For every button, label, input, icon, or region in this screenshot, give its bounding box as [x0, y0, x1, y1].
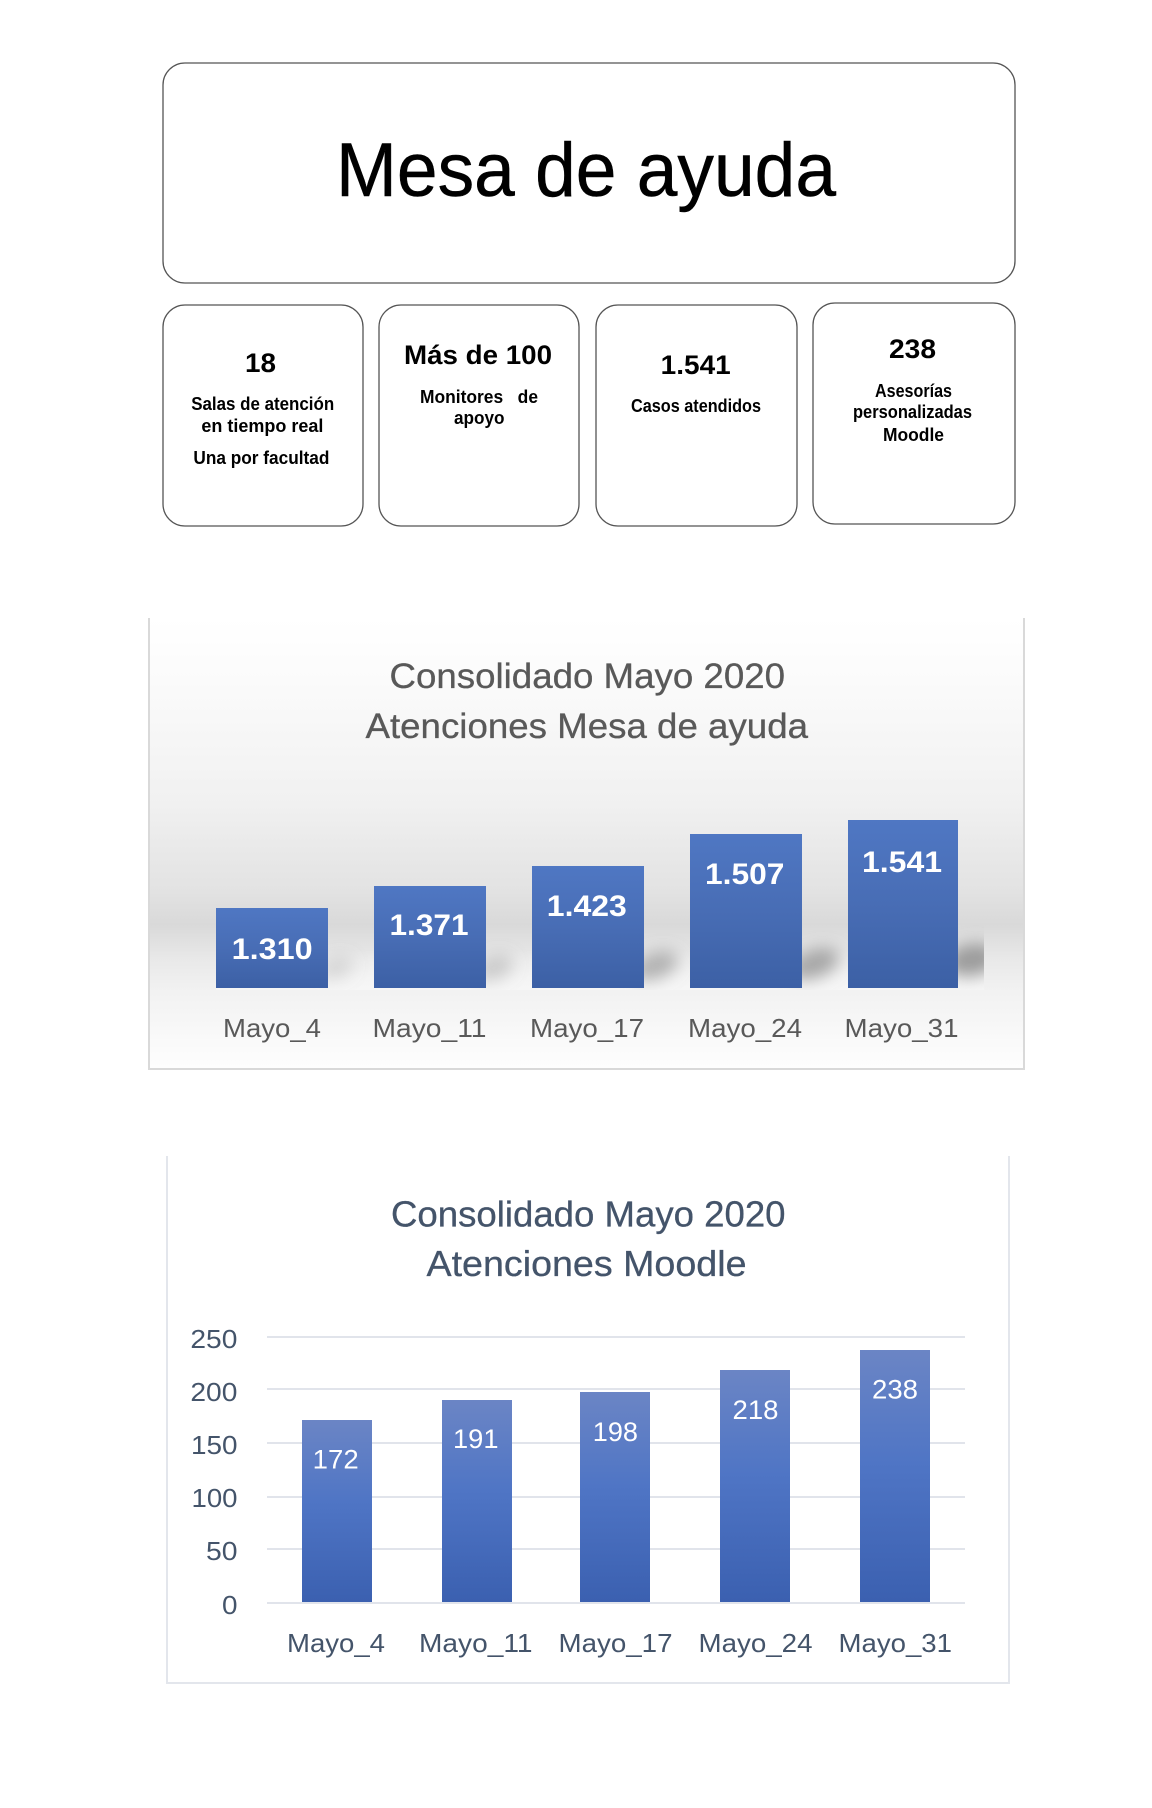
card: asesorías personalizadas: 238 — [889, 334, 936, 364]
card: monitores de apoyo: Monitores de — [420, 387, 538, 407]
card: salas de atención: en tiempo real — [201, 416, 323, 436]
bars — [216, 820, 958, 988]
value labels — [232, 846, 942, 966]
card: salas de atención — [163, 305, 363, 526]
card: salas de atención: 18 — [245, 348, 276, 378]
panel: chart atenciones moodle — [167, 1156, 1009, 1683]
value labels: 191 — [453, 1424, 498, 1454]
category labels: Mayo_17 — [558, 1628, 672, 1658]
panel: chart atenciones mesa de ayuda — [149, 618, 1024, 1069]
title: Mesa de ayuda — [336, 128, 837, 213]
y axis labels — [190, 1324, 238, 1620]
category labels: Mayo_17 — [530, 1013, 644, 1043]
value labels — [313, 1374, 918, 1474]
y axis labels: 250 — [190, 1324, 237, 1354]
card: asesorías personalizadas: Moodle — [883, 425, 944, 445]
card: casos atendidos — [596, 305, 797, 526]
gridlines — [267, 1337, 965, 1603]
card: casos atendidos: 1.541 — [661, 350, 731, 380]
value labels: 218 — [732, 1395, 778, 1425]
bars — [302, 1350, 930, 1602]
title panel — [163, 63, 1015, 283]
category labels: Mayo_11 — [419, 1628, 532, 1658]
chart title: Atenciones Moodle — [426, 1243, 746, 1284]
card: casos atendidos: Casos atendidos — [631, 396, 761, 416]
card: asesorías personalizadas: personalizadas — [853, 402, 972, 422]
bar shadows — [328, 935, 984, 986]
y axis labels: 0 — [222, 1590, 238, 1620]
category labels: Mayo_4 — [287, 1628, 385, 1658]
card: asesorías personalizadas — [813, 303, 1015, 524]
chart title: Consolidado Mayo 2020 — [390, 657, 785, 696]
chart title — [366, 657, 809, 746]
chart title — [391, 1194, 786, 1284]
chart title: Atenciones Mesa de ayuda — [366, 707, 809, 746]
category labels: Mayo_24 — [698, 1628, 812, 1658]
value labels: 198 — [593, 1417, 638, 1447]
y axis labels: 100 — [192, 1483, 238, 1513]
category labels: Mayo_11 — [372, 1013, 486, 1043]
value labels: 1.541 — [862, 846, 942, 879]
y axis labels: 150 — [191, 1430, 238, 1460]
card: monitores de apoyo: apoyo — [454, 408, 504, 428]
category labels — [223, 1013, 958, 1043]
category labels: Mayo_24 — [688, 1013, 802, 1043]
card: salas de atención: Una por facultad — [193, 448, 329, 468]
value labels: 238 — [872, 1374, 918, 1404]
y axis labels: 50 — [206, 1536, 238, 1566]
value labels: 1.310 — [232, 933, 313, 966]
value labels: 1.371 — [390, 909, 468, 942]
chart title: Consolidado Mayo 2020 — [391, 1194, 786, 1234]
value labels: 1.423 — [547, 890, 627, 923]
category labels: Mayo_31 — [838, 1628, 952, 1658]
card: monitores de apoyo — [379, 305, 579, 526]
category labels: Mayo_31 — [844, 1013, 958, 1043]
card: salas de atención: Salas de atención — [191, 394, 334, 414]
value labels: 172 — [313, 1444, 359, 1474]
category labels — [287, 1628, 952, 1658]
card: asesorías personalizadas: Asesorías — [875, 381, 952, 401]
category labels: Mayo_4 — [223, 1013, 321, 1043]
value labels: 1.507 — [705, 858, 784, 891]
card: monitores de apoyo: Más de 100 — [404, 340, 552, 370]
y axis labels: 200 — [190, 1377, 237, 1407]
